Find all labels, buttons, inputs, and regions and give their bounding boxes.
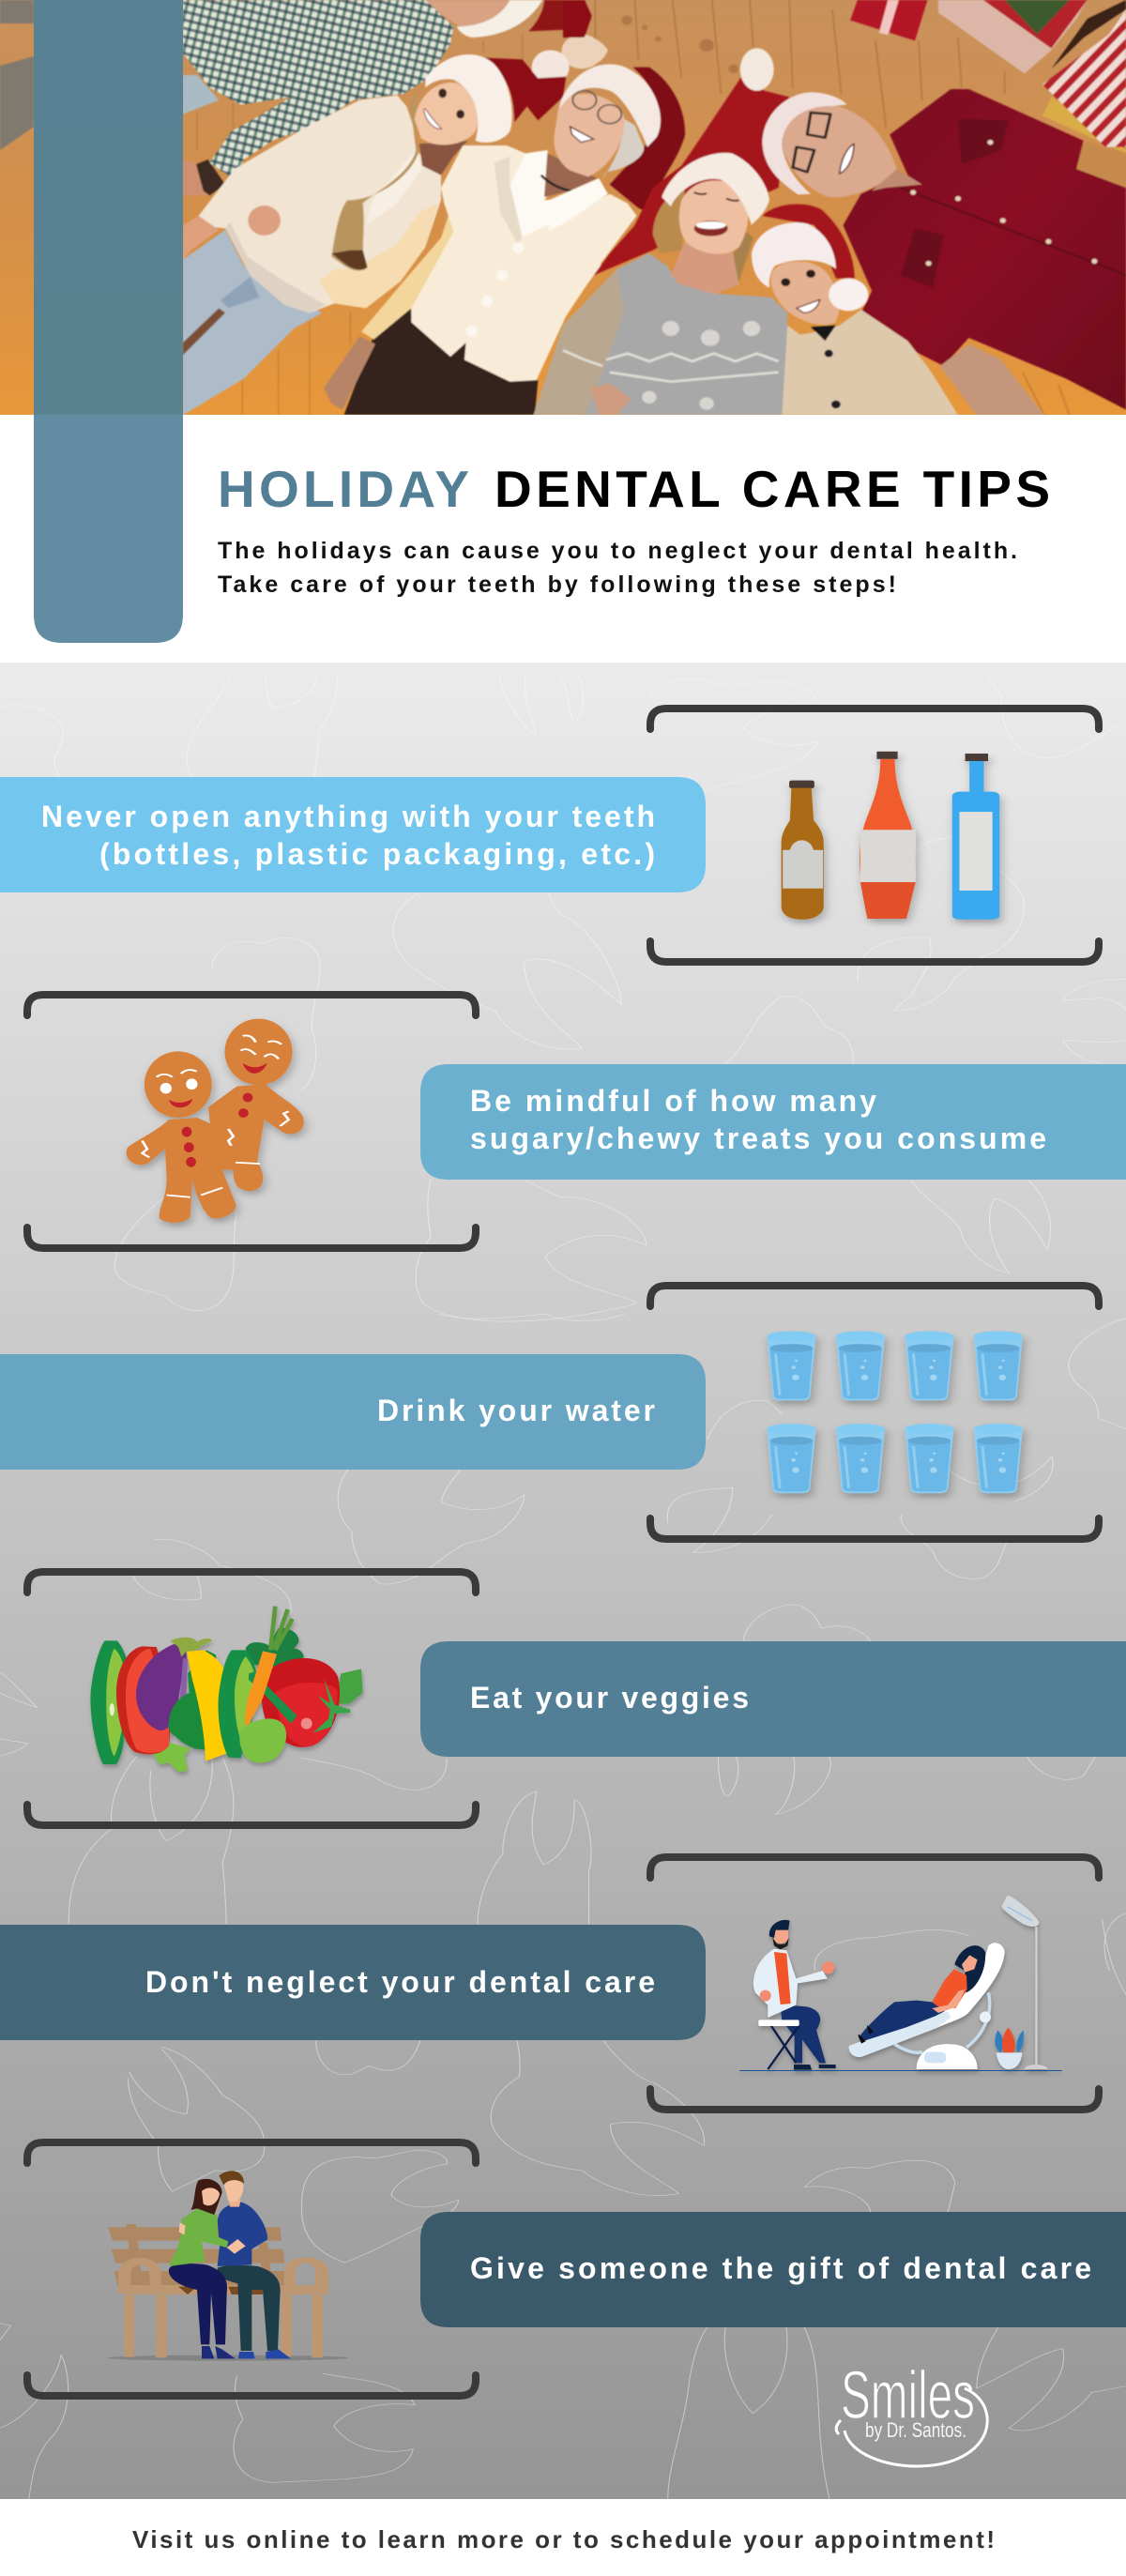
girl sweater — [199, 96, 441, 312]
hero photo: family in santa hats lying on wooden floor — [0, 0, 1126, 415]
title: DENTAL CARE TIPS — [495, 460, 1050, 518]
grey gradient background with tooth outlines — [0, 663, 1126, 2499]
presents — [850, 0, 927, 40]
subtitle: The holidays can cause you to neglect your dental health. — [218, 538, 1017, 564]
tip 6: frame — [27, 2142, 476, 2396]
left strip: floor and grey trousers — [0, 0, 34, 150]
subtitle: Take care of your teeth by following these steps! — [218, 572, 896, 598]
dentist — [781, 2004, 826, 2063]
title: HOLIDAY — [218, 460, 469, 518]
tip 5: frame — [650, 1857, 1099, 2110]
logo: Smiles by Dr. Santos — [836, 2358, 987, 2466]
tip 4: pill — [420, 1641, 1126, 1757]
footer bar: Visit us online to learn more or to schedule your appointment! — [132, 2525, 995, 2553]
icon: couple on bench — [107, 2171, 348, 2361]
grandfather head — [762, 92, 846, 194]
tip 2: pill — [420, 1064, 1126, 1180]
tip 4: frame — [27, 1572, 476, 1825]
logo: Smiles by Dr. Santos: Smiles — [841, 2358, 975, 2433]
white title panel — [0, 415, 1126, 663]
boy — [782, 310, 958, 415]
tip 1: pill: (bottles, plastic packaging, etc.) — [99, 837, 655, 871]
girl face — [415, 83, 478, 145]
logo: Smiles by Dr. Santos: by Dr. Santos. — [865, 2418, 966, 2442]
right half of photo: grandmother head, mother, boy, grandfather, presents — [534, 0, 1126, 415]
icon: dentist and patient — [739, 1896, 1062, 2071]
icon: three bottles — [782, 752, 999, 920]
tip 3: pill: Drink your water — [377, 1394, 655, 1427]
title — [218, 460, 1050, 518]
tip 1: pill: Never open anything with your teeth — [41, 800, 655, 833]
tip 6: pill — [420, 2212, 1126, 2327]
icon: vegetables — [90, 1607, 363, 1772]
grandfather shirt — [844, 89, 1126, 410]
tip 3: frame — [650, 1286, 1099, 1539]
tip 4: pill: Eat your veggies — [470, 1681, 749, 1715]
tip 5: pill — [0, 1925, 706, 2040]
tip 2: pill: Be mindful of how many — [470, 1084, 876, 1118]
mother sweater, face — [584, 252, 788, 415]
tip 3: pill — [0, 1354, 706, 1470]
tip 6: pill: Give someone the gift of dental care — [470, 2251, 1091, 2285]
blue vertical header bar — [34, 0, 183, 643]
girl hat — [485, 58, 566, 122]
grandmother head — [563, 0, 592, 38]
watch and hand — [183, 161, 208, 196]
subtitle — [218, 538, 1017, 598]
mother hat — [594, 75, 789, 275]
icon: gingerbread men — [127, 1019, 304, 1223]
footer bar — [0, 2499, 1126, 2576]
hair — [331, 91, 419, 270]
tip 1: pill — [0, 777, 706, 892]
left half of photo: checked shirt, girl, grandmother — [183, 0, 602, 415]
tip 5: pill: Don't neglect your dental care — [145, 1965, 655, 1999]
jeans — [183, 230, 322, 415]
tip 2: frame — [27, 995, 476, 1248]
tip 1: frame — [650, 709, 1099, 962]
grandmother skirt, cardigan — [344, 308, 538, 415]
tip 2: pill: sugary/chewy treats you consume — [470, 1121, 1046, 1155]
icon: eight water glasses — [767, 1331, 1023, 1493]
